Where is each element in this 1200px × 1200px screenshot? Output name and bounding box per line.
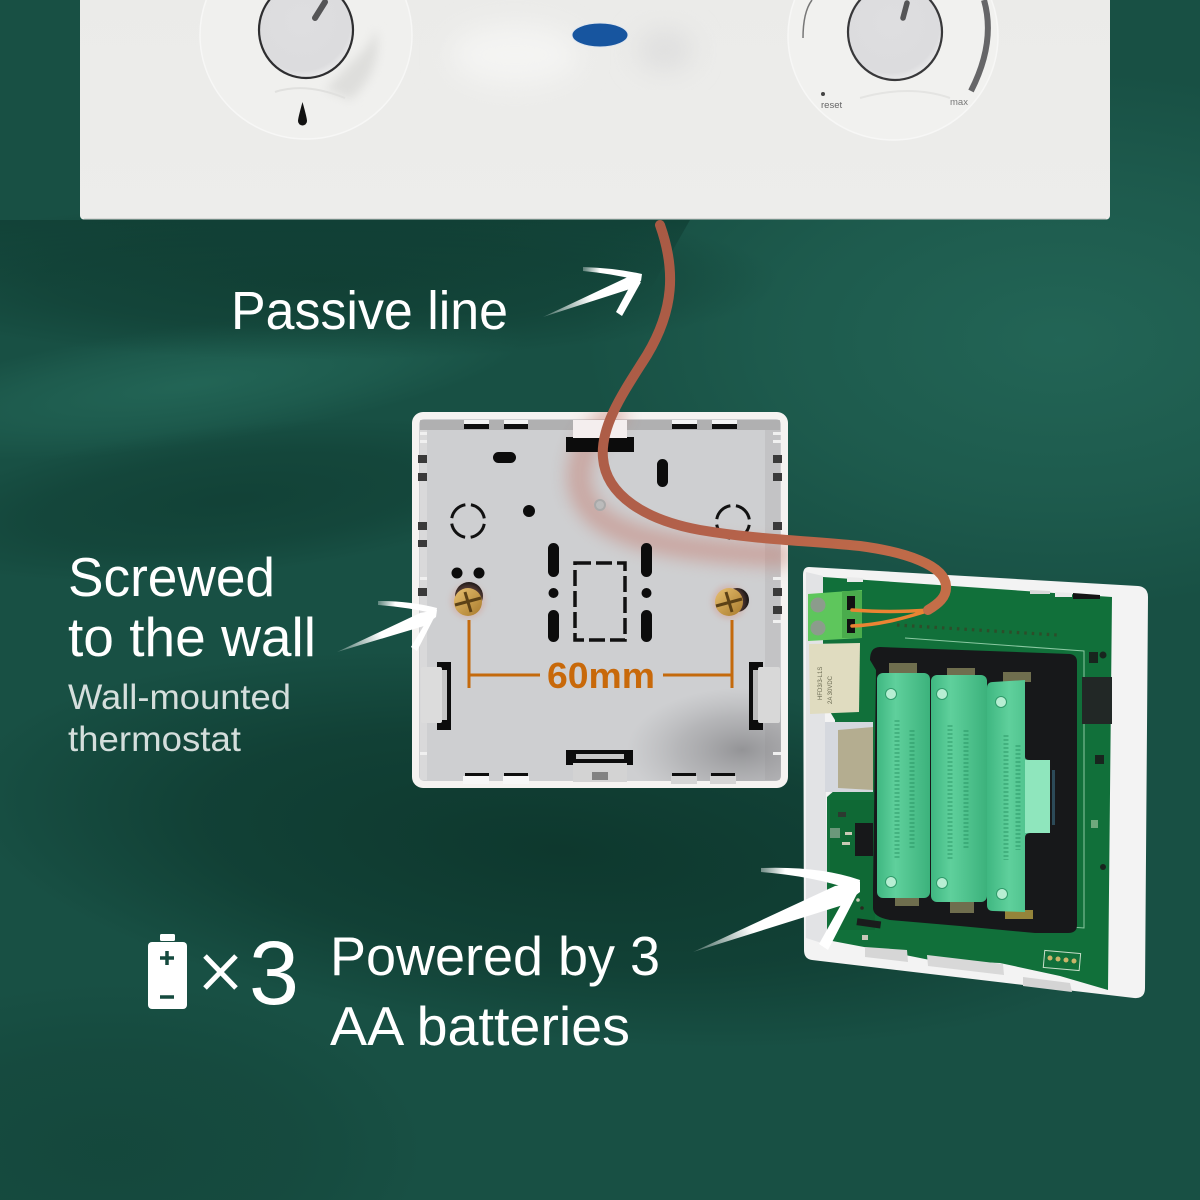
wireless module: [825, 722, 873, 792]
edge notches: [418, 420, 782, 784]
60mm dimension: [469, 620, 732, 696]
text block: powered by 3 AA batteries: [330, 925, 660, 1057]
battery print: [897, 720, 1018, 860]
top cable slot: [566, 420, 634, 452]
text block: powered by 3 AA batteries: AA batteries: [330, 995, 630, 1057]
text block: screwed to the wall: [68, 546, 316, 759]
battery count: icon and times three: [148, 924, 299, 1024]
terminal block: [808, 590, 862, 641]
arrow: passive line: [543, 267, 642, 317]
mounting holes: [452, 452, 668, 642]
heading: passive line: Passive line: [231, 281, 508, 341]
relay: 2A 30VDC: [828, 675, 834, 704]
contact row: [897, 625, 1057, 635]
text block: powered by 3 AA batteries: Powered by 3: [330, 925, 660, 987]
text block: screwed to the wall: to the wall: [68, 606, 316, 668]
60mm dimension: 60mm: [547, 655, 655, 696]
dashed knockout rectangle: [575, 563, 625, 640]
bottom clip: [566, 750, 633, 782]
text block: screwed to the wall: Wall-mounted: [68, 678, 291, 717]
boiler panel: [80, 0, 1110, 220]
text block: screwed to the wall: thermostat: [68, 720, 241, 759]
text block: screwed to the wall: Screwed: [68, 546, 275, 608]
left dial with water-drop mark: [200, 0, 412, 139]
bottom and top clips of the case: [847, 577, 1100, 992]
battery count: icon and times three: 3: [249, 924, 299, 1024]
relay: HFD3/3-L1S: [818, 667, 824, 700]
chip and components: [830, 652, 1112, 971]
icon: battery: [148, 934, 187, 1009]
screw left: [451, 582, 485, 618]
PCB: [823, 577, 1112, 990]
plate shadow: [647, 699, 781, 781]
battery module: open thermostat body: [803, 567, 1148, 998]
right dial with reset and max scale: [788, 0, 998, 140]
side clips: [421, 662, 780, 730]
polarity marks: [886, 688, 1008, 900]
screw right: [712, 585, 749, 619]
blue indicator light: [572, 23, 628, 47]
right dial with reset and max scale: reset: [821, 100, 842, 111]
arrow: screwed to the wall: [337, 601, 437, 652]
knockout rings: [449, 502, 752, 541]
battery holder: [870, 647, 1077, 933]
brown passive-line cable: [603, 225, 946, 626]
right dial with reset and max scale: max: [950, 97, 968, 108]
relay: [809, 643, 860, 714]
wall plate: thermostat back plate: [412, 412, 788, 788]
three AA batteries: [877, 663, 1050, 919]
wire glow on plate: [579, 408, 790, 556]
arrow: batteries: [693, 868, 860, 952]
